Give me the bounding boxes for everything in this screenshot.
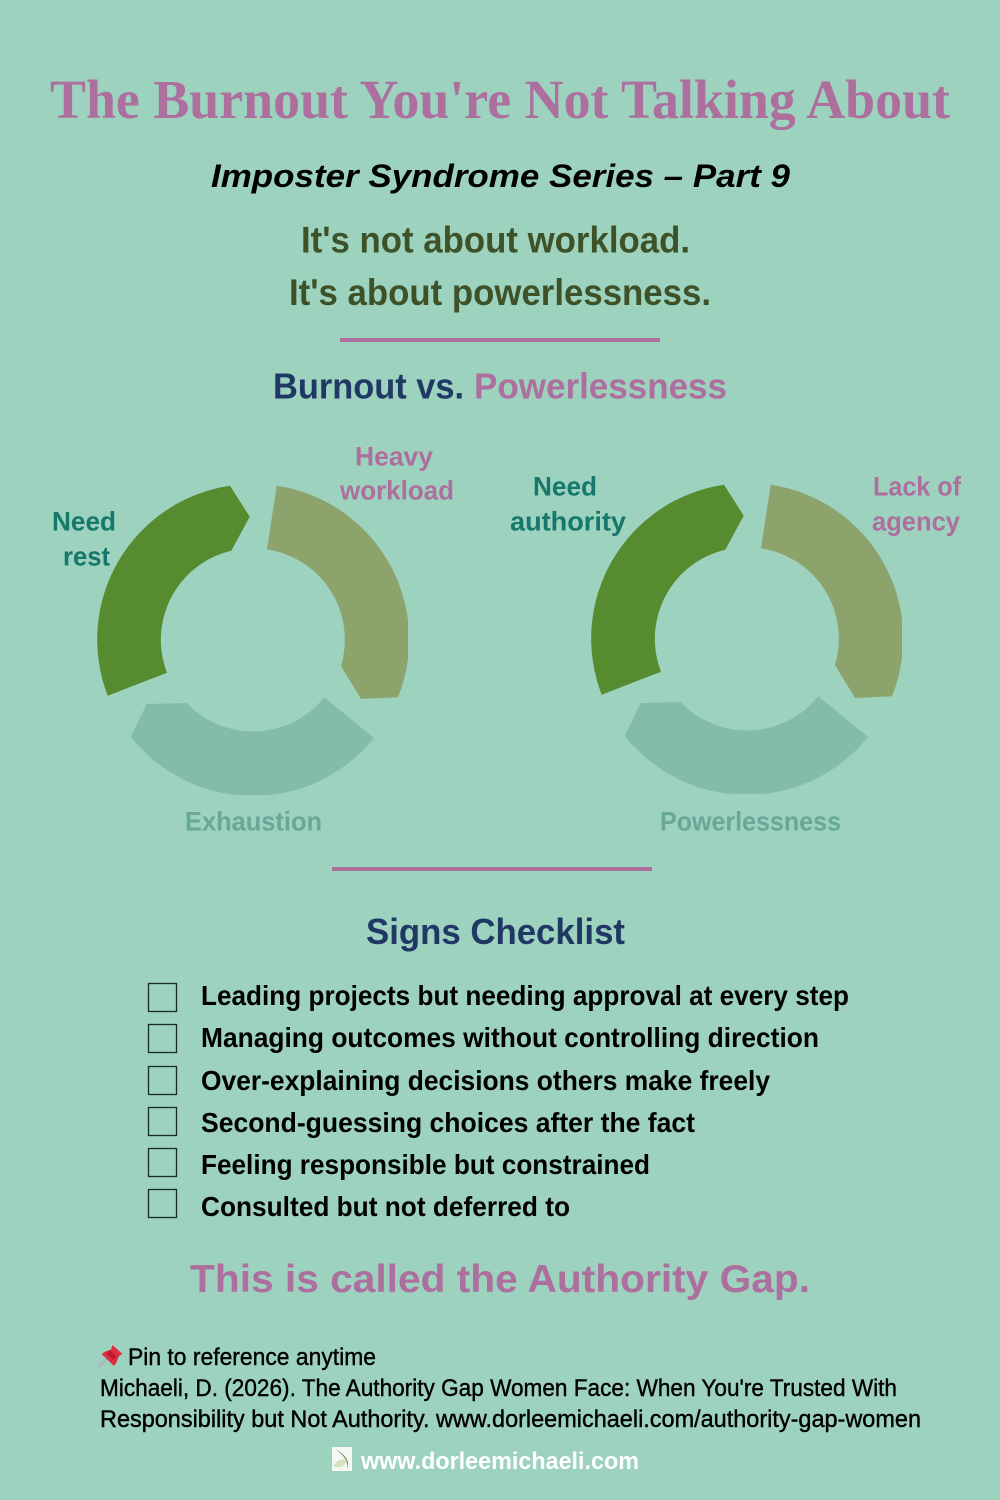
footer text	[100, 1344, 921, 1433]
segment: need authority	[591, 485, 744, 695]
icon: logo	[332, 1447, 352, 1471]
footer text: Responsibility but Not Authority. www.dorleemichaeli.com/authority-gap-women	[100, 1406, 921, 1433]
website url: www.dorleemichaeli.com	[360, 1448, 639, 1475]
subtitle: Imposter Syndrome Series – Part 9	[211, 158, 790, 194]
label: heavy workload: workload	[339, 476, 454, 506]
chart: powerlessness cycle	[510, 472, 962, 836]
footer text: Pin to reference anytime	[128, 1344, 376, 1371]
checklist items: Feeling responsible but constrained	[201, 1149, 650, 1180]
label: need authority	[510, 472, 626, 536]
section heading: burnout vs powerlessness	[273, 366, 727, 406]
checklist items: Managing outcomes without controlling direction	[201, 1022, 819, 1053]
checklist items	[201, 980, 849, 1222]
tagline: It's not about workload.	[301, 220, 690, 260]
checklist items: Second-guessing choices after the fact	[201, 1107, 695, 1138]
section heading: burnout vs powerlessness: Burnout vs.	[273, 366, 464, 406]
segment: exhaustion	[131, 697, 374, 796]
checklist items: Consulted but not deferred to	[201, 1191, 570, 1222]
label: heavy workload: Heavy	[355, 442, 433, 472]
segment: lack of agency	[761, 485, 903, 698]
segment: heavy workload	[267, 486, 409, 699]
label: lack of agency: Lack of	[873, 472, 962, 502]
label: need rest	[52, 506, 116, 572]
checklist	[148, 980, 849, 1222]
label: need authority: authority	[510, 506, 626, 536]
label: heavy workload	[339, 442, 454, 506]
segment: powerlessness	[625, 696, 868, 795]
checklist items: Over-explaining decisions others make freely	[201, 1065, 770, 1096]
footer text: Michaeli, D. (2026). The Authority Gap Women Face: When You're Trusted With	[100, 1375, 897, 1402]
checkboxes	[148, 984, 176, 1218]
tagline: It's about powerlessness.	[289, 272, 711, 313]
label: need authority: Need	[533, 472, 597, 502]
checklist items: Leading projects but needing approval at every step	[201, 980, 849, 1011]
tagline	[289, 220, 711, 313]
label: need rest: Need	[52, 506, 116, 536]
title: The Burnout You're Not Talking About	[50, 69, 951, 130]
label: need rest: rest	[63, 542, 110, 572]
segment: need rest	[97, 486, 250, 696]
chart: burnout cycle	[52, 442, 454, 836]
label: lack of agency	[872, 472, 962, 536]
section heading: signs checklist: Signs Checklist	[366, 911, 625, 952]
label: powerlessness: Powerlessness	[660, 806, 841, 836]
section heading: burnout vs powerlessness: Powerlessness	[474, 366, 727, 406]
label: lack of agency: agency	[872, 506, 960, 536]
icon: pushpin	[98, 1345, 122, 1367]
label: exhaustion: Exhaustion	[185, 806, 322, 836]
callout: authority gap: This is called the Authority Gap.	[190, 1258, 810, 1301]
